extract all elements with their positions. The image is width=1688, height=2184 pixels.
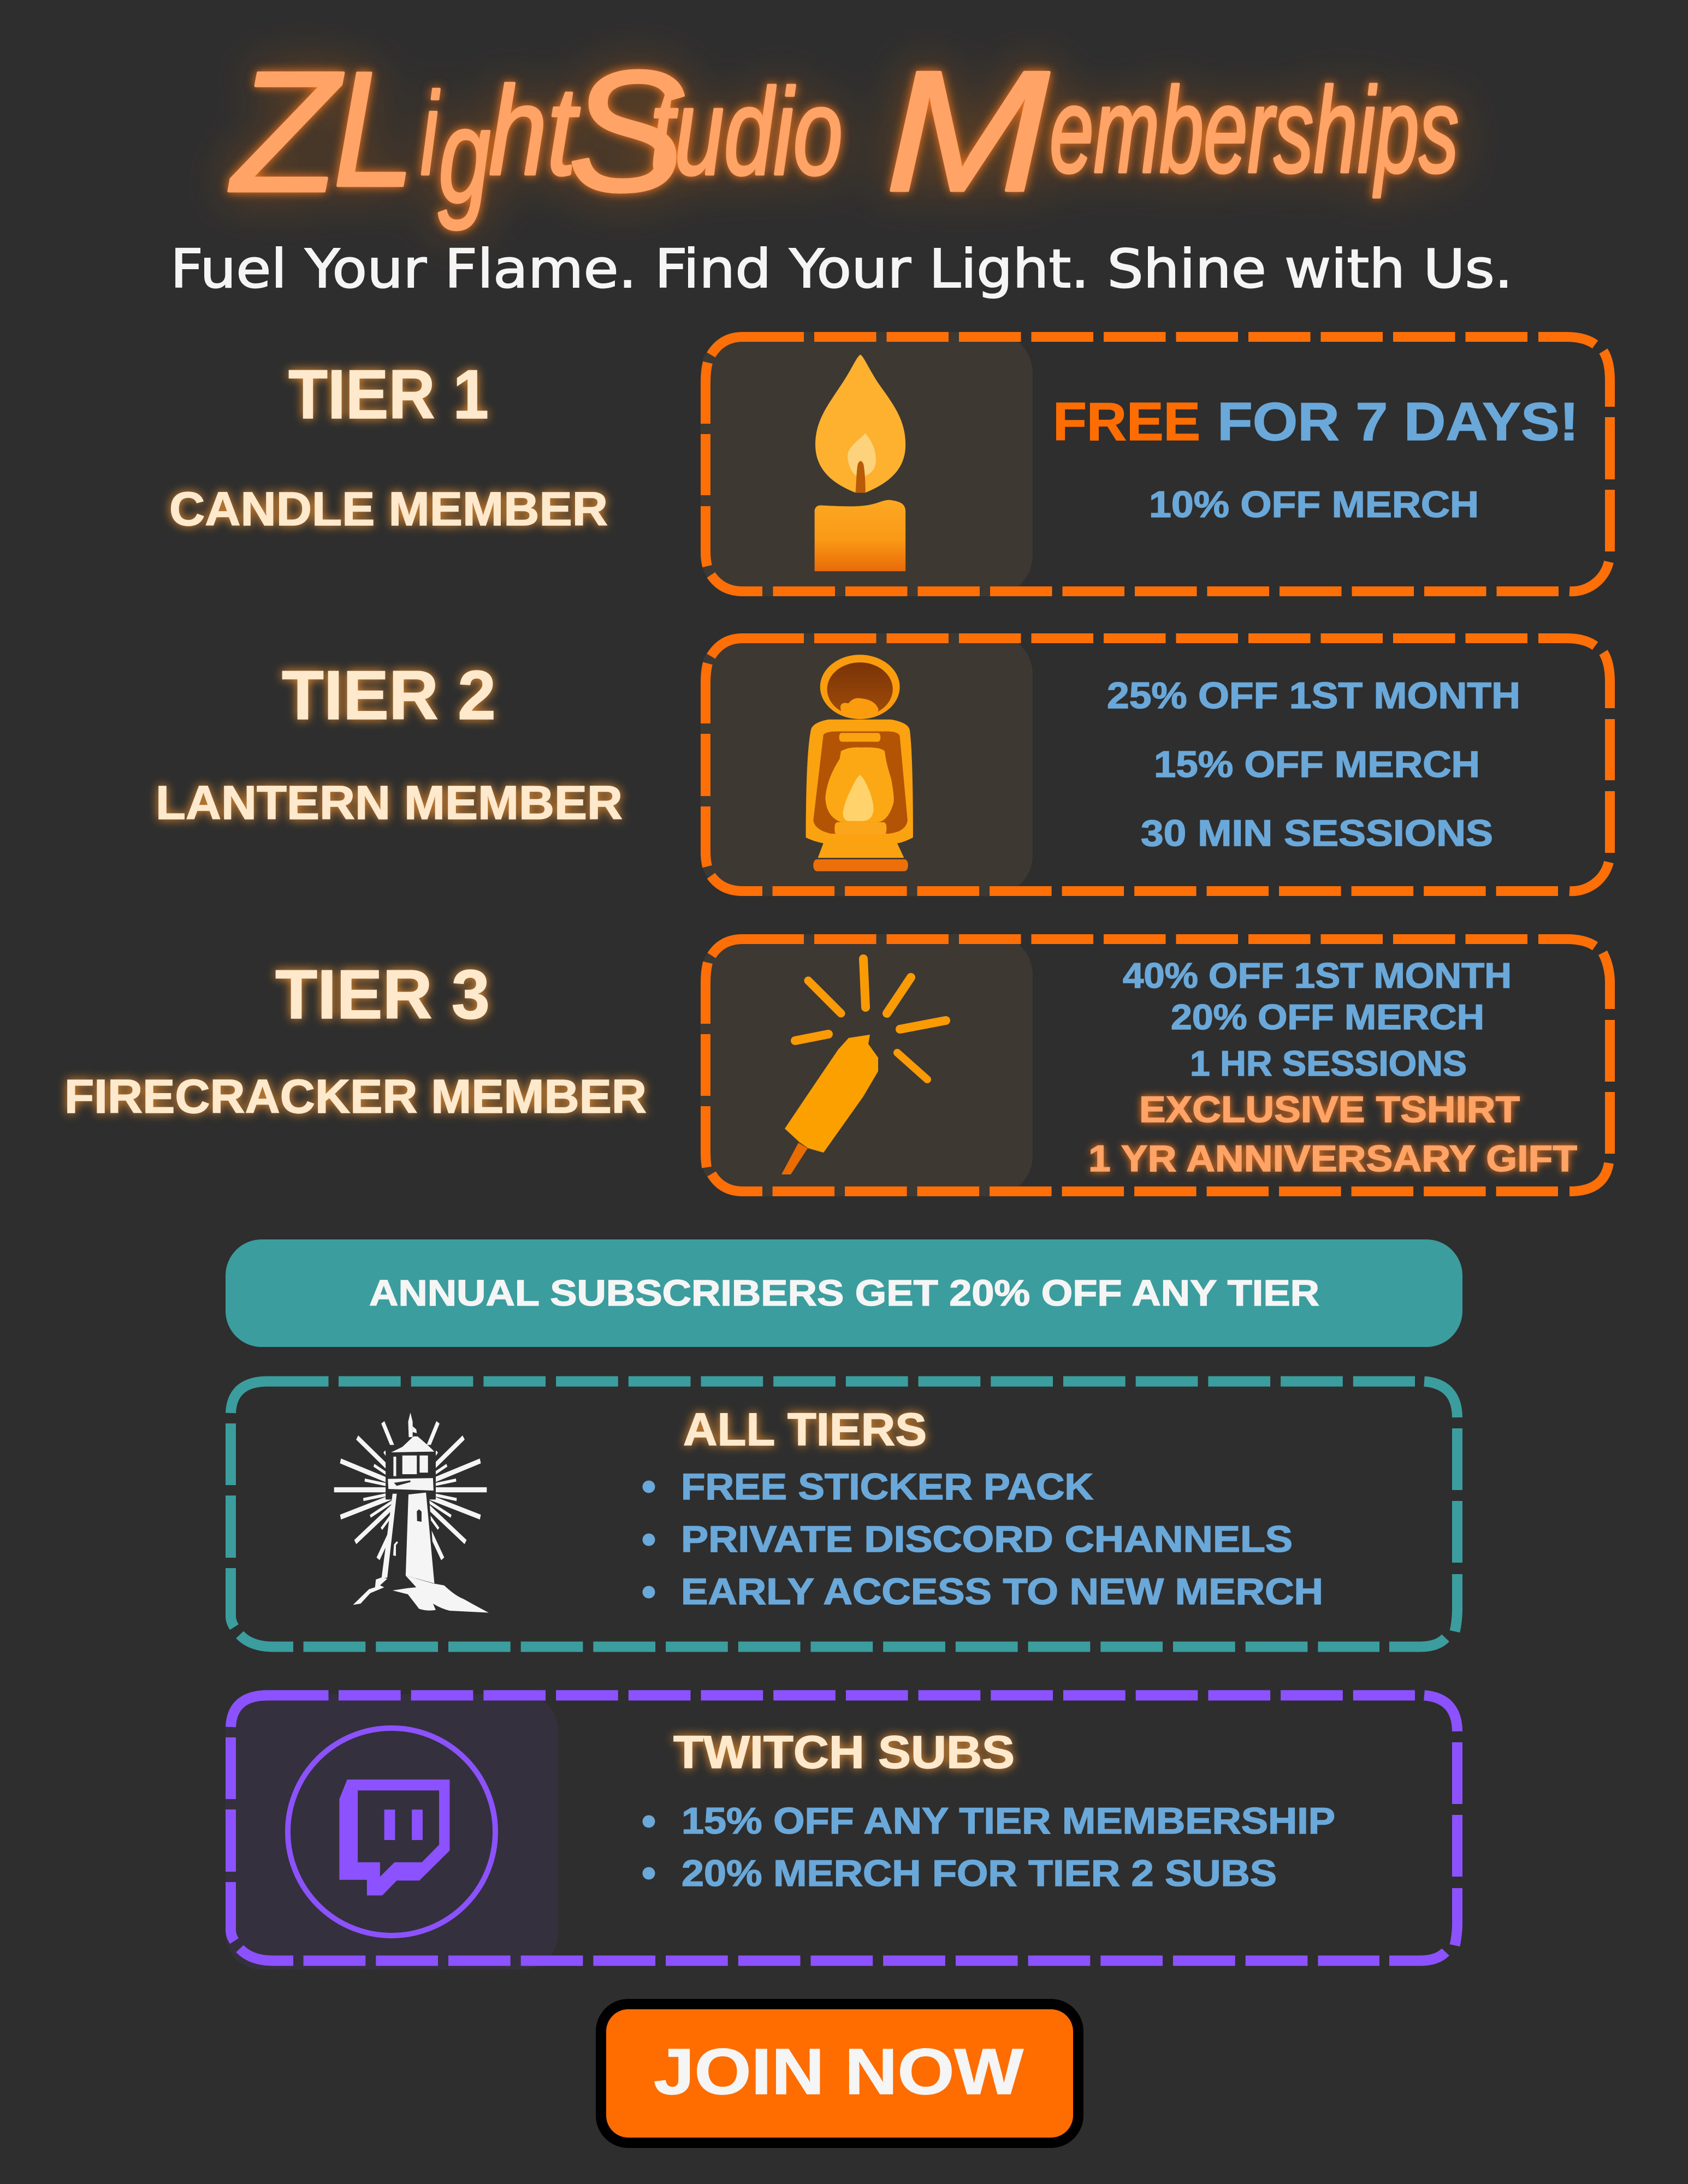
banner: annual discount <box>226 1239 1462 1347</box>
tier 3 heading: TIER 3 <box>275 956 490 1033</box>
tagline: Fuel Your Flame. Find Your Light. Shine with Us. <box>170 238 1513 300</box>
icon: lantern <box>806 655 913 871</box>
text: tier 3 benefits: 1 HR SESSIONS <box>1190 1043 1467 1083</box>
icon: candle <box>815 355 905 571</box>
tier 1 name: CANDLE MEMBER <box>169 483 608 536</box>
title: S <box>568 35 685 227</box>
list: twitch subs benefits <box>642 1800 1335 1894</box>
tier 2 heading: TIER 2 <box>282 656 496 734</box>
icon: firecracker <box>781 959 946 1174</box>
tier 2 name: LANTERN MEMBER <box>156 776 623 829</box>
button: join now <box>601 2004 1078 2143</box>
list: twitch subs benefits: 20% MERCH FOR TIER 2 SUBS <box>682 1853 1277 1894</box>
text: tier 3 benefits: 1 YR ANNIVERSARY GIFT <box>1088 1138 1577 1179</box>
list: all tiers benefits: PRIVATE DISCORD CHANNELS <box>681 1518 1293 1560</box>
title: M <box>885 35 1051 227</box>
text: tier 2 benefits: 25% OFF 1ST MONTH <box>1107 675 1520 716</box>
panel: tier 2 card <box>701 633 1610 896</box>
text: all tiers heading: ALL TIERS <box>683 1404 927 1455</box>
list: all tiers benefits: FREE STICKER PACK <box>681 1466 1093 1508</box>
icon: lighthouse <box>334 1413 489 1613</box>
list: all tiers benefits: EARLY ACCESS TO NEW MERCH <box>681 1571 1323 1612</box>
text: tier 1 benefits: FOR 7 DAYS! <box>1217 391 1579 452</box>
list: all tiers benefits <box>642 1466 1323 1612</box>
text: tier 2 benefits: 15% OFF MERCH <box>1154 744 1480 785</box>
panel: tier 1 card <box>701 332 1610 596</box>
text: tier 1 benefits: FREE <box>1053 391 1200 452</box>
panel: tier 3 card <box>701 934 1610 1196</box>
text: tier 3 benefits <box>1088 956 1577 1179</box>
title: ht <box>489 61 580 201</box>
banner: annual discount: ANNUAL SUBSCRIBERS GET 20% OFF ANY TIER <box>369 1273 1319 1314</box>
title: tudio <box>650 63 843 200</box>
button: join now: JOIN NOW <box>654 2035 1024 2108</box>
text: tier 2 benefits: 30 MIN SESSIONS <box>1141 812 1493 854</box>
text: tier 3 benefits: 20% OFF MERCH <box>1171 997 1484 1037</box>
icon: twitch logo <box>288 1728 495 1936</box>
title <box>227 35 1459 230</box>
title: Z <box>227 35 344 228</box>
tier 1 heading: TIER 1 <box>288 355 489 433</box>
text: tier 3 benefits: 40% OFF 1ST MONTH <box>1123 956 1512 995</box>
list: twitch subs benefits: 15% OFF ANY TIER MEMBERSHIP <box>682 1800 1335 1842</box>
text: tier 3 benefits: EXCLUSIVE TSHIRT <box>1139 1089 1520 1130</box>
text: twitch subs heading: TWITCH SUBS <box>673 1726 1015 1778</box>
text: tier 2 benefits <box>1107 675 1520 854</box>
panel: all tiers <box>230 1381 1457 1647</box>
text: tier 1 benefits: 10% OFF MERCH <box>1149 484 1479 525</box>
title: L <box>333 37 415 221</box>
panel: twitch subs <box>226 1694 1457 1969</box>
title: g <box>439 81 490 230</box>
tier 3 name: FIRECRACKER MEMBER <box>64 1070 647 1123</box>
title: emberships <box>1050 63 1459 198</box>
text: tier 1 benefits <box>1053 391 1579 525</box>
title: i <box>420 68 440 199</box>
